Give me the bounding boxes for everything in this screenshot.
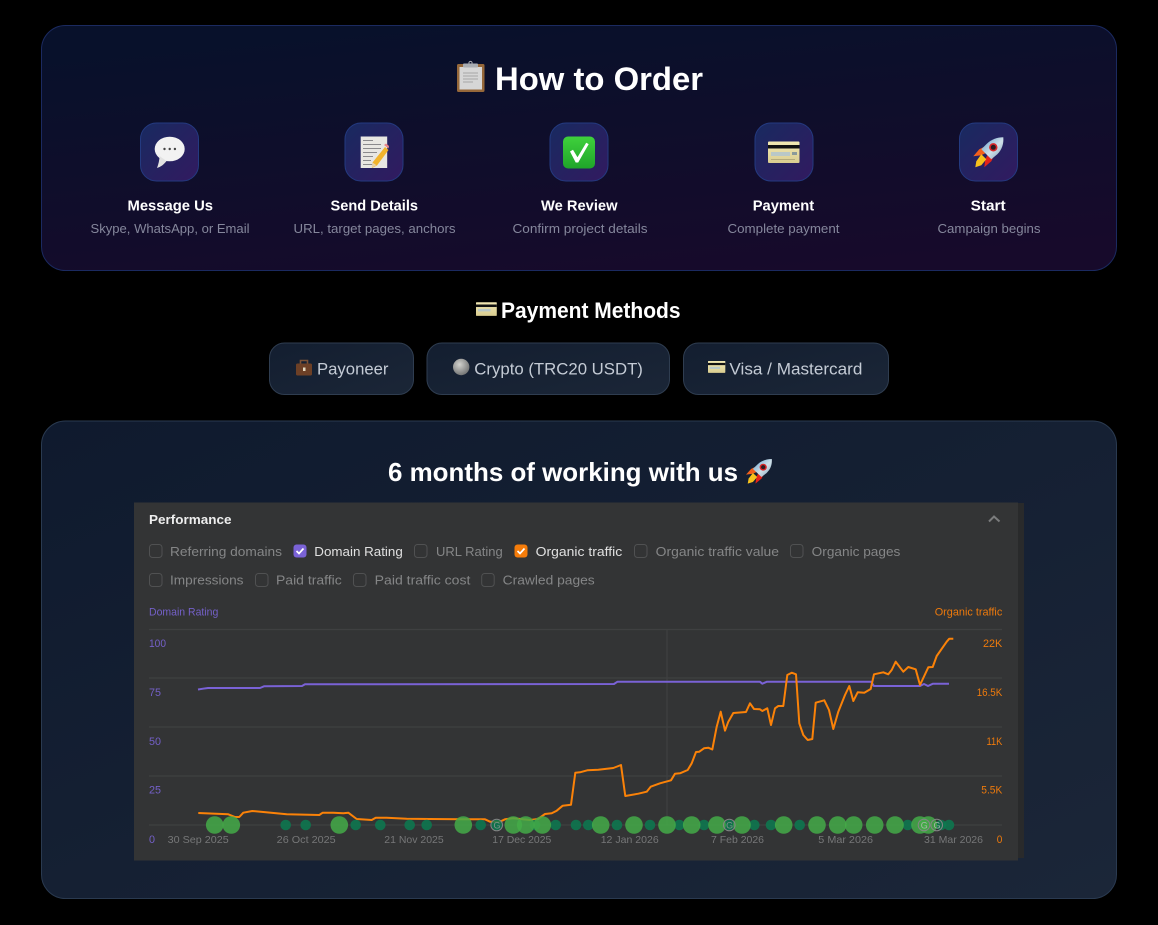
right axis values: 16.5K bbox=[977, 687, 1003, 699]
metric checkboxes: URL Rating bbox=[436, 544, 503, 559]
date axis labels: 17 Dec 2025 bbox=[492, 834, 551, 846]
card heading: Performance bbox=[149, 512, 232, 527]
google update markers: G bbox=[921, 820, 928, 830]
icon: check mark bbox=[563, 136, 595, 168]
line chart bbox=[149, 629, 1003, 846]
pill: payoneer bbox=[270, 343, 414, 394]
date axis labels: 31 Mar 2026 bbox=[924, 834, 983, 846]
payment methods heading: Payment Methods bbox=[501, 298, 680, 323]
metric checkboxes: Paid traffic cost bbox=[375, 572, 471, 588]
metric checkboxes: Impressions bbox=[170, 572, 244, 588]
icon: briefcase bbox=[296, 360, 312, 376]
panel: how to order bbox=[42, 26, 1116, 270]
left axis values: 25 bbox=[149, 784, 161, 796]
step description: Campaign begins bbox=[938, 221, 1041, 236]
step heading: Message Us bbox=[128, 198, 213, 214]
results heading: 6 months of working with us bbox=[388, 457, 738, 487]
title: How to Order bbox=[495, 61, 703, 97]
date axis labels: 7 Feb 2026 bbox=[711, 834, 764, 846]
metric checkboxes: Organic traffic bbox=[536, 544, 623, 559]
performance chart card bbox=[134, 502, 1024, 860]
pill: visa mastercard: Visa / Mastercard bbox=[729, 360, 862, 378]
date axis labels: 30 Sep 2025 bbox=[168, 834, 229, 846]
date axis labels: 5 Mar 2026 bbox=[818, 834, 873, 846]
icon: credit card bbox=[768, 142, 800, 163]
date axis labels: 12 Jan 2026 bbox=[601, 834, 659, 846]
metric checkboxes: Organic traffic value bbox=[656, 544, 779, 559]
date axis labels: 26 Oct 2025 bbox=[277, 834, 336, 846]
left axis values bbox=[149, 638, 166, 846]
right axis title: Organic traffic bbox=[935, 606, 1003, 618]
step: we review bbox=[512, 123, 648, 236]
icon: credit card bbox=[708, 361, 725, 373]
left axis values: 100 bbox=[149, 638, 166, 650]
icon tile: start bbox=[960, 123, 1018, 181]
left axis title: Domain Rating bbox=[149, 606, 218, 618]
step: send details bbox=[294, 123, 456, 236]
google update markers: G bbox=[726, 820, 733, 830]
icon tile: payment bbox=[755, 123, 813, 181]
icon tile: message us bbox=[140, 123, 198, 181]
step: payment bbox=[728, 123, 840, 236]
date axis labels bbox=[168, 834, 983, 846]
step description: Confirm project details bbox=[512, 221, 648, 236]
right axis values: 5.5K bbox=[981, 784, 1003, 796]
step description: Complete payment bbox=[728, 221, 840, 236]
step heading: Start bbox=[971, 198, 1006, 214]
icon: rocket bbox=[973, 137, 1003, 167]
icon: speech bubble bbox=[155, 137, 185, 168]
step: start bbox=[938, 123, 1041, 236]
panel: six months results bbox=[42, 421, 1116, 898]
icon: collapse chevron bbox=[989, 516, 1000, 522]
left axis values: 0 bbox=[149, 834, 155, 846]
date axis labels: 21 Nov 2025 bbox=[384, 834, 444, 846]
right axis values bbox=[977, 638, 1003, 846]
google update markers: G bbox=[494, 820, 501, 830]
left axis values: 50 bbox=[149, 736, 161, 748]
step heading: Send Details bbox=[330, 198, 418, 214]
left axis values: 75 bbox=[149, 687, 161, 699]
step heading: Payment bbox=[753, 198, 814, 214]
right axis values: 0 bbox=[997, 834, 1002, 846]
step: message us bbox=[90, 123, 250, 236]
icon tile: we review bbox=[550, 123, 608, 181]
pill: payoneer: Payoneer bbox=[317, 360, 389, 378]
metric checkboxes: Referring domains bbox=[170, 544, 283, 559]
metric checkboxes: Organic pages bbox=[812, 544, 901, 559]
icon: clipboard bbox=[457, 61, 484, 92]
organic traffic line bbox=[198, 639, 953, 822]
pill: crypto: Crypto (TRC20 USDT) bbox=[474, 360, 643, 378]
icon: rocket bbox=[746, 459, 772, 484]
small link markers bbox=[280, 820, 954, 830]
icon tile: send details bbox=[345, 123, 403, 181]
right axis values: 11K bbox=[986, 736, 1003, 748]
metric checkboxes bbox=[150, 544, 901, 588]
icon: memo bbox=[361, 136, 389, 168]
step description: URL, target pages, anchors bbox=[294, 221, 456, 236]
pill: crypto bbox=[427, 343, 670, 394]
pill: visa mastercard bbox=[684, 343, 888, 394]
google update markers: G bbox=[934, 820, 941, 830]
domain rating line bbox=[198, 682, 949, 690]
step heading: We Review bbox=[541, 198, 618, 214]
metric checkboxes: Crawled pages bbox=[503, 572, 595, 588]
google update markers bbox=[491, 819, 942, 831]
icon: moon coin bbox=[453, 359, 469, 375]
right axis values: 22K bbox=[983, 638, 1003, 650]
step description: Skype, WhatsApp, or Email bbox=[90, 221, 250, 236]
large link markers bbox=[206, 816, 937, 834]
metric checkboxes: Paid traffic bbox=[276, 572, 342, 588]
metric checkboxes: Domain Rating bbox=[314, 544, 403, 559]
